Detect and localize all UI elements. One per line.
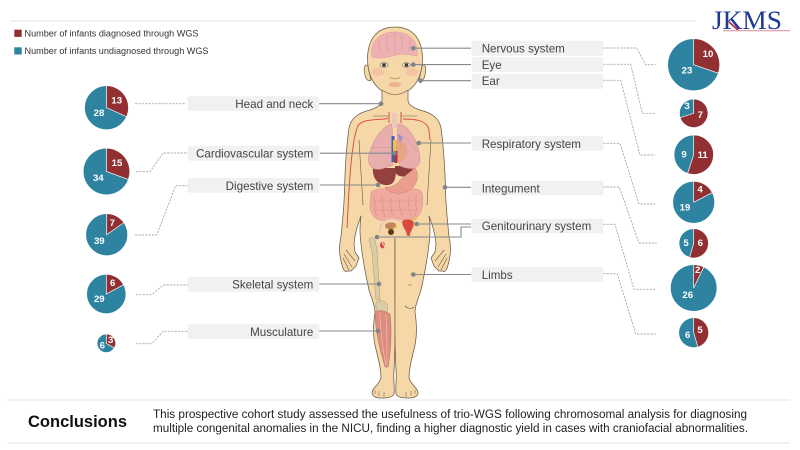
stomach, liver and intestine — [370, 166, 423, 220]
label: Eye — [472, 57, 603, 72]
pie: Ear — [674, 135, 713, 174]
pie: Genitourinary system: 2 — [695, 265, 700, 276]
label: Digestive system: Digestive system — [226, 180, 313, 193]
pie: Digestive system: 39 — [94, 236, 105, 247]
pie: Eye: 7 — [698, 110, 703, 121]
pie: Cardiovascular system: 34 — [93, 173, 104, 184]
pie: Limbs — [679, 318, 709, 348]
pie: Skeletal system: 29 — [94, 294, 105, 305]
label: Skeletal system — [188, 277, 319, 292]
label: Limbs: Limbs — [482, 269, 513, 282]
conclusions text: This prospective cohort study assessed the usefulness of trio-WGS following chromosomal analysis for diagnosing — [153, 407, 747, 421]
body illustration — [340, 27, 450, 398]
pie: Digestive system — [86, 214, 128, 256]
pie: Head and neck — [84, 86, 129, 130]
label: Nervous system — [472, 41, 603, 56]
pie: Limbs: 5 — [697, 325, 703, 336]
label: Integument — [472, 181, 603, 195]
pie: Head and neck: 28 — [94, 108, 105, 119]
pie: Respiratory system: 4 — [697, 184, 703, 196]
pie: Integument: 5 — [683, 238, 689, 249]
legend — [14, 28, 209, 56]
label: Eye: Eye — [482, 59, 502, 72]
label: Skeletal system: Skeletal system — [232, 279, 313, 292]
label: Nervous system: Nervous system — [482, 43, 565, 56]
pie: Musculature: 6 — [100, 340, 105, 352]
arteries — [347, 112, 430, 228]
legend: Number of infants diagnosed through WGS — [24, 28, 199, 38]
pie: Cardiovascular system — [83, 148, 130, 195]
skin silhouette — [340, 27, 450, 398]
pie: Eye — [679, 99, 708, 128]
label: Ear — [472, 74, 603, 89]
conclusions text — [153, 407, 748, 435]
pie: Musculature — [97, 334, 116, 353]
pie: Genitourinary system — [670, 265, 717, 311]
genitourinary organs — [376, 217, 417, 252]
leg bones — [369, 238, 388, 316]
label: Digestive system — [188, 178, 319, 193]
pie: Digestive system: 7 — [110, 218, 115, 229]
ears — [364, 65, 426, 81]
label: Head and neck: Head and neck — [235, 98, 313, 111]
pie: Skeletal system — [87, 274, 126, 314]
pie: Respiratory system — [673, 181, 715, 223]
label: Genitourinary system: Genitourinary system — [482, 220, 591, 233]
label: Head and neck — [188, 96, 319, 111]
label: Respiratory system: Respiratory system — [482, 138, 581, 151]
conclusions text: multiple congenital anomalies in the NICU, finding a higher diagnostic yield in cases with craniofacial abnormalities. — [153, 421, 748, 435]
pie: Nervous system — [668, 39, 720, 91]
pie: Nervous system: 23 — [682, 66, 692, 76]
label: Ear: Ear — [482, 75, 500, 88]
legend: Number of infants undiagnosed through WGS — [24, 46, 209, 56]
dashed connectors — [135, 48, 657, 344]
pie: Integument — [679, 229, 708, 258]
pie: Ear: 9 — [681, 150, 687, 160]
lungs and heart — [369, 113, 420, 169]
label: Limbs — [472, 267, 603, 282]
logo: JKMS: JKMS — [712, 6, 782, 35]
pie: Head and neck: 13 — [111, 96, 122, 106]
face — [372, 63, 418, 87]
label: Integument: Integument — [482, 182, 540, 195]
pie: Limbs: 6 — [685, 330, 690, 341]
pie: Musculature: 3 — [108, 335, 113, 346]
label: Musculature — [188, 324, 319, 339]
brain — [372, 32, 417, 58]
heading: Conclusions: Conclusions — [28, 412, 127, 431]
pie: Respiratory system: 19 — [680, 202, 690, 214]
leader lines — [319, 46, 471, 333]
label: Musculature: Musculature — [250, 326, 313, 339]
pie: Integument: 6 — [698, 238, 703, 249]
pie: Genitourinary system: 26 — [682, 290, 693, 301]
label: Respiratory system — [472, 136, 603, 151]
pie: Skeletal system: 6 — [110, 278, 115, 289]
pie: Cardiovascular system: 15 — [112, 158, 123, 169]
pie: Nervous system: 10 — [703, 49, 713, 60]
label: Cardiovascular system: Cardiovascular system — [196, 148, 313, 160]
pie: Eye: 3 — [684, 101, 690, 112]
pie: Ear: 11 — [698, 150, 708, 161]
leg muscles — [375, 311, 391, 367]
